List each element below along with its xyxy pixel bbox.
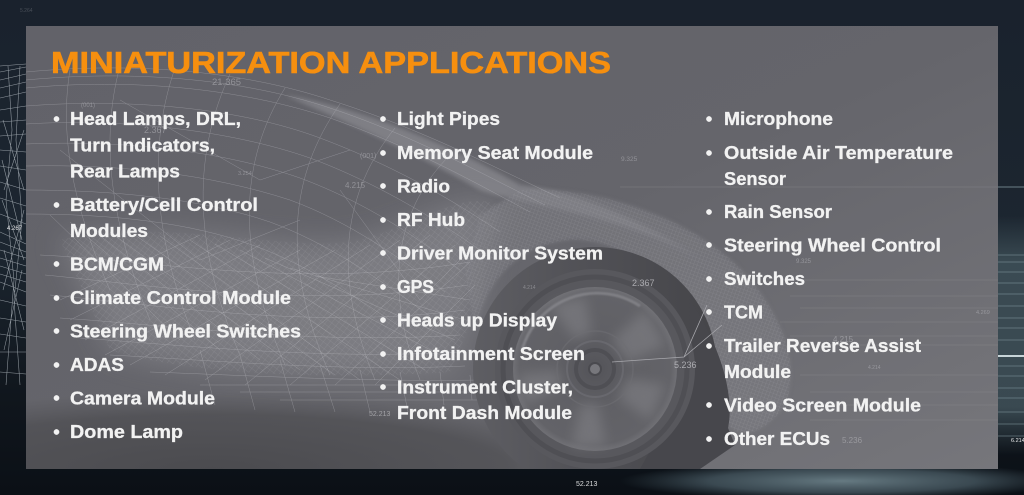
title: MINIATURIZATION APPLICATIONS	[51, 46, 611, 80]
background: wireframe left of panel	[0, 64, 26, 385]
item: GPS	[380, 277, 434, 297]
item: switches: Switches	[724, 269, 805, 289]
item: infotainment: Infotainment Screen	[397, 344, 585, 364]
item: driver monitor: Driver Monitor System	[397, 244, 603, 264]
item: steering control: Steering Wheel Control	[724, 236, 941, 256]
background: right edge speed streaks	[998, 187, 1024, 455]
item: battery: Battery/Cell Control	[70, 195, 258, 215]
item: head lamps: Turn Indicators,	[70, 136, 215, 156]
wheel: rim	[513, 287, 677, 451]
item: battery	[54, 195, 258, 241]
background label: top corner: 5.264	[20, 8, 33, 14]
faint dimension numbers: 9.325	[796, 259, 812, 265]
list column 3	[706, 109, 953, 449]
item: RF hub: RF Hub	[397, 210, 465, 230]
item: rain sensor: Rain Sensor	[724, 202, 832, 222]
faint dimension numbers	[81, 77, 990, 445]
item: battery: Modules	[70, 221, 148, 241]
item: TCM: TCM	[724, 302, 763, 322]
faint dimension numbers: 4.215	[345, 181, 366, 190]
faint dimension numbers: 4.214	[868, 365, 881, 371]
item: other ECUs: Other ECUs	[724, 429, 830, 449]
wheel: arch	[473, 247, 717, 491]
car: rear wheel	[473, 247, 735, 491]
faint dimension numbers: 4.269	[976, 310, 990, 316]
list column 1	[54, 109, 301, 442]
background label: 52.213: 52.213	[576, 481, 598, 488]
item: steering switches: Steering Wheel Switches	[70, 322, 301, 342]
background: bottom glow	[620, 460, 1024, 495]
item: instrument cluster	[380, 378, 573, 423]
faint dimension numbers: 52.213	[369, 411, 391, 418]
item: dome lamp: Dome Lamp	[70, 422, 183, 442]
item: camera: Camera Module	[70, 388, 215, 408]
faint dimension numbers: 9.325	[621, 156, 638, 163]
background label: 4.267: 4.267	[7, 226, 23, 232]
car: lower mesh lines	[40, 215, 520, 412]
panel: horizontal speed streaks	[620, 187, 998, 420]
faint dimension numbers: 2.367	[632, 278, 655, 288]
item: memory seat: Memory Seat Module	[397, 143, 593, 163]
faint dimension numbers: 5.236	[842, 436, 863, 445]
wheel: tyre	[594, 269, 695, 468]
wheel: hub rings	[566, 340, 624, 398]
item: head lamps: Rear Lamps	[70, 162, 180, 182]
item: outside air temperature: Sensor	[724, 169, 786, 189]
car: dense mesh haze	[60, 95, 791, 433]
item: ADAS: ADAS	[70, 355, 124, 375]
item: radio: Radio	[397, 176, 450, 196]
panel: dark lower-left shading	[26, 402, 525, 469]
item: head lamps: Head Lamps, DRL,	[70, 109, 241, 129]
item: TCM	[706, 302, 763, 322]
faint dimension numbers: 2.367	[144, 125, 167, 135]
item: trailer reverse assist: Trailer Reverse Assist	[724, 336, 921, 356]
item: video screen: Video Screen Module	[724, 396, 921, 416]
item: outside air temperature: Outside Air Temperature	[724, 143, 953, 163]
wheel: spoke highlights	[518, 297, 665, 447]
item: instrument cluster: Front Dash Module	[397, 403, 572, 423]
item: light pipes: Light Pipes	[397, 109, 500, 129]
faint dimension numbers: 4.215	[833, 335, 854, 344]
faint dimension numbers: 21.365	[212, 77, 241, 88]
item: climate: Climate Control Module	[70, 288, 291, 308]
faint dimension numbers: (001)	[360, 153, 376, 160]
item: trailer reverse assist: Module	[724, 362, 791, 382]
item: head lamps	[54, 109, 241, 182]
item: instrument cluster: Instrument Cluster,	[397, 378, 573, 398]
faint dimension numbers: (001)	[81, 103, 95, 109]
faint dimension numbers: 4.214	[523, 285, 536, 291]
dimension lines	[612, 305, 722, 362]
faint dimension numbers: 3.254	[238, 171, 252, 177]
list column 2	[380, 109, 603, 423]
item: BCM: BCM/CGM	[70, 254, 164, 274]
item: microphone: Microphone	[724, 109, 833, 129]
item: outside air temperature	[706, 143, 953, 189]
car body wireframe	[26, 66, 791, 491]
car: roof and hood grid lines	[26, 66, 560, 380]
faint dimension numbers: 5.236	[674, 360, 697, 370]
wheel: tyre sidewall	[503, 277, 687, 461]
item: GPS: GPS	[397, 277, 434, 297]
item: heads up display: Heads up Display	[397, 310, 557, 330]
wheel: hub center	[589, 363, 601, 375]
wheel: arch rear wedge	[665, 346, 735, 469]
item: trailer reverse assist	[706, 336, 921, 382]
